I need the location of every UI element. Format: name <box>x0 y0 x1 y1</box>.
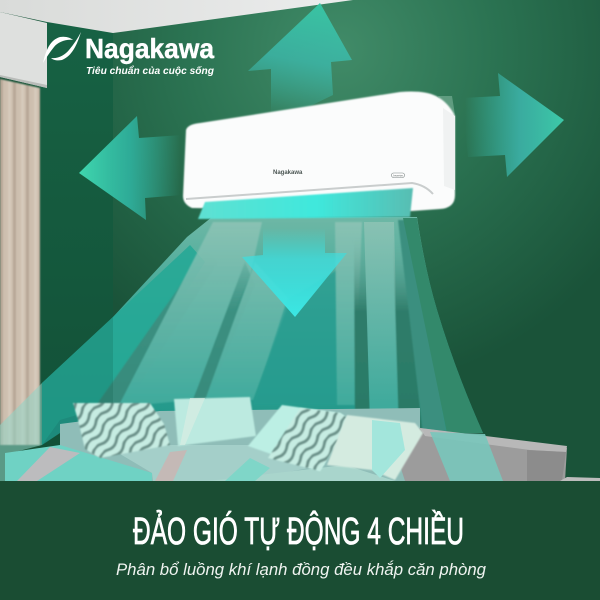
pillow: zebra left <box>73 403 170 458</box>
inverter badge: Inverter <box>393 174 403 178</box>
sofa <box>0 383 600 481</box>
pale beam <box>335 222 362 405</box>
fan base <box>42 217 483 445</box>
sofa centre seat <box>105 445 325 481</box>
dark band centre left <box>193 262 255 400</box>
subtitle: Phân bổ luồng khí lạnh đồng đều khắp căn phòng <box>116 560 487 579</box>
outer right bands <box>398 220 447 433</box>
dark band left <box>95 250 218 407</box>
logo wordmark: Nagakawa <box>85 33 214 64</box>
sofa left seat <box>5 445 152 481</box>
airflow beams <box>42 217 483 445</box>
lower trim <box>186 183 433 199</box>
arrow: down <box>242 228 347 317</box>
arrow: up <box>248 3 352 125</box>
arrow: left <box>79 116 182 220</box>
mounting plate <box>438 96 455 115</box>
light beam right <box>364 222 399 420</box>
light beam centre left <box>205 262 290 400</box>
main light beam <box>118 222 262 407</box>
curtain <box>0 79 40 445</box>
bottom panel <box>0 481 600 600</box>
body fold shading <box>443 108 455 190</box>
air conditioner unit <box>183 92 455 219</box>
centre teal beam <box>253 270 337 405</box>
curtain bottom tint <box>0 383 42 481</box>
unit body <box>183 92 455 211</box>
inverter badge <box>392 173 404 178</box>
arrow: right <box>462 73 564 177</box>
logo tagline: Tiêu chuẩn của cuộc sống <box>86 65 214 77</box>
pillow: zebra right <box>248 405 351 471</box>
louver <box>198 188 413 219</box>
outer bright band left <box>42 245 205 445</box>
unit brand text: Nagakawa <box>273 170 303 176</box>
sofa back <box>60 408 420 481</box>
dark band right <box>393 230 423 430</box>
logo mark <box>43 32 81 63</box>
ceiling and soffit <box>0 0 353 88</box>
logo <box>43 32 214 77</box>
sofa right arm <box>395 428 567 481</box>
wall corner shading over beams <box>42 317 113 445</box>
dark band centre right <box>354 240 370 415</box>
pillow: plain centre <box>174 397 256 446</box>
pillow: plain far right <box>327 415 423 480</box>
